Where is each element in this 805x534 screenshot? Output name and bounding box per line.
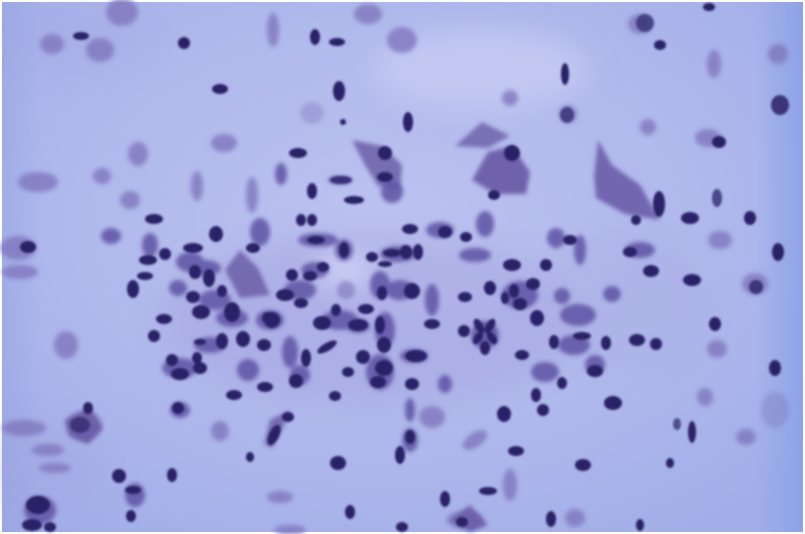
central inflammatory infiltrate: purple cytoplasm	[24, 163, 655, 524]
large neurons	[65, 122, 660, 532]
